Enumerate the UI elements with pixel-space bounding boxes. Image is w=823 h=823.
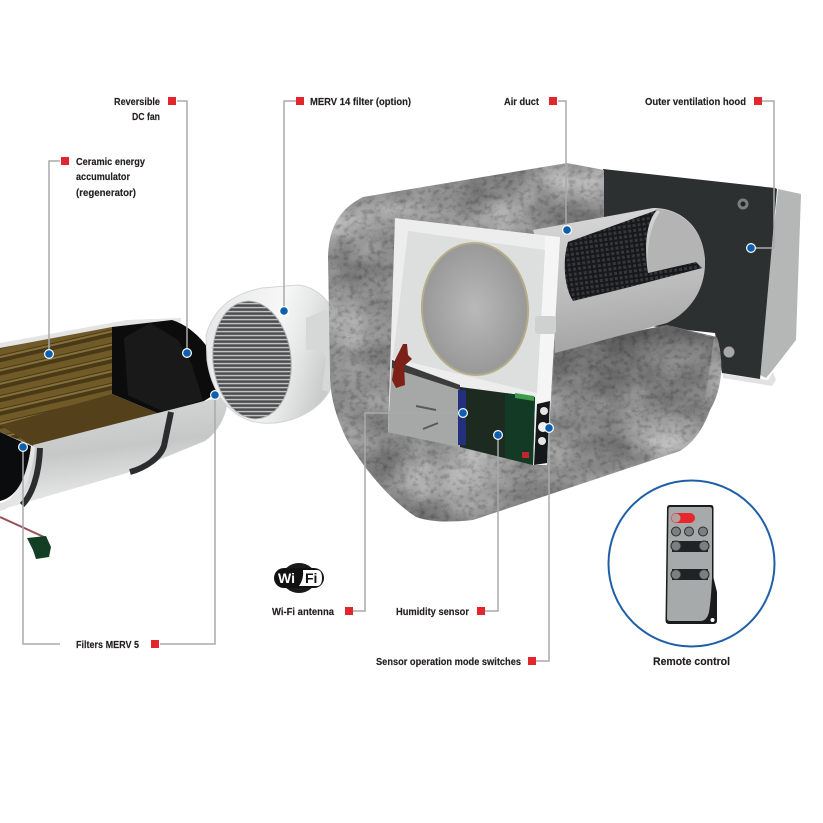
filter housing bbox=[206, 285, 342, 423]
illustration: wall section and duct bbox=[328, 163, 801, 522]
cable and connector bbox=[0, 517, 51, 559]
label: humidity sensor: Humidity sensor bbox=[396, 607, 469, 618]
plate inner recess bbox=[393, 231, 545, 393]
duct tube bbox=[533, 208, 705, 353]
grille bbox=[207, 297, 297, 423]
control board bbox=[460, 387, 535, 465]
concrete wall bbox=[328, 163, 721, 522]
duct inner end bbox=[648, 209, 705, 274]
label: ceramic energy accumulator bbox=[76, 157, 145, 199]
power switch bbox=[671, 513, 695, 523]
leader lines bbox=[23, 101, 774, 661]
icon: Wi-Fi logo bbox=[274, 563, 324, 593]
red terminal bbox=[392, 344, 412, 388]
front plate bbox=[388, 218, 560, 465]
plate clip bbox=[535, 316, 556, 334]
icon: Wi-Fi logo: Wi bbox=[278, 570, 295, 586]
label: Wi-Fi antenna: Wi-Fi antenna bbox=[272, 607, 334, 618]
label: ceramic energy accumulator: accumulator bbox=[76, 172, 130, 183]
remote circle bbox=[608, 480, 774, 646]
black mounting panel bbox=[603, 169, 777, 379]
red jumper bbox=[522, 452, 529, 458]
label: remote control: Remote control bbox=[653, 656, 730, 668]
white end rim bbox=[0, 447, 35, 511]
hood foot strip bbox=[723, 372, 776, 386]
top rim of tube bbox=[0, 318, 181, 348]
label: reversible DC fan bbox=[114, 97, 160, 123]
black regenerator mesh bbox=[565, 210, 702, 301]
board green area bbox=[505, 393, 535, 465]
strap hole bbox=[710, 618, 714, 622]
filter black end bbox=[0, 432, 31, 501]
front plate edge bbox=[533, 236, 560, 465]
illustration: heat recovery tube assembly bbox=[0, 318, 228, 559]
remote face bbox=[667, 507, 712, 621]
remote buttons bbox=[671, 527, 709, 580]
bay wires bbox=[416, 406, 438, 429]
icon: Wi-Fi logo: Fi bbox=[305, 570, 317, 586]
blue antenna bbox=[458, 390, 466, 445]
label: sensor operation mode switches: Sensor operation mode switches bbox=[376, 657, 521, 668]
housing shading bbox=[306, 310, 342, 392]
label: outer ventilation hood: Outer ventilation hood bbox=[645, 97, 746, 108]
shell straps bbox=[22, 412, 171, 505]
label: ceramic energy accumulator: Ceramic energy bbox=[76, 157, 145, 168]
blue markers bbox=[19, 226, 755, 451]
gold regenerator bbox=[0, 325, 160, 446]
black fan and end cap bbox=[112, 320, 225, 414]
illustration: MERV 14 filter bbox=[206, 285, 342, 423]
panel bolts bbox=[724, 198, 748, 358]
label: air duct: Air duct bbox=[504, 97, 540, 108]
ledge shadow under duct bbox=[550, 325, 714, 420]
clear wiring bay bbox=[388, 360, 460, 447]
fan housing detail bbox=[124, 323, 203, 412]
label: reversible DC fan: DC fan bbox=[132, 112, 160, 123]
button bars bbox=[672, 541, 708, 552]
label: reversible DC fan: Reversible bbox=[114, 97, 160, 108]
label: filters MERV 5: Filters MERV 5 bbox=[76, 640, 139, 651]
switch strip bbox=[534, 401, 550, 465]
label: ceramic energy accumulator: (regenerator) bbox=[76, 188, 136, 199]
bay top shadow bbox=[392, 360, 460, 390]
lower regenerator face bbox=[0, 394, 160, 446]
green terminal bbox=[515, 393, 534, 401]
red label squares bbox=[61, 97, 762, 665]
tube outer shell bbox=[0, 395, 228, 510]
panel: remote control bbox=[608, 480, 774, 646]
label: MERV 14 filter: MERV 14 filter (option) bbox=[310, 97, 411, 108]
remote body bbox=[666, 505, 717, 624]
round opening bbox=[419, 240, 531, 378]
silver outer hood bbox=[758, 189, 801, 378]
